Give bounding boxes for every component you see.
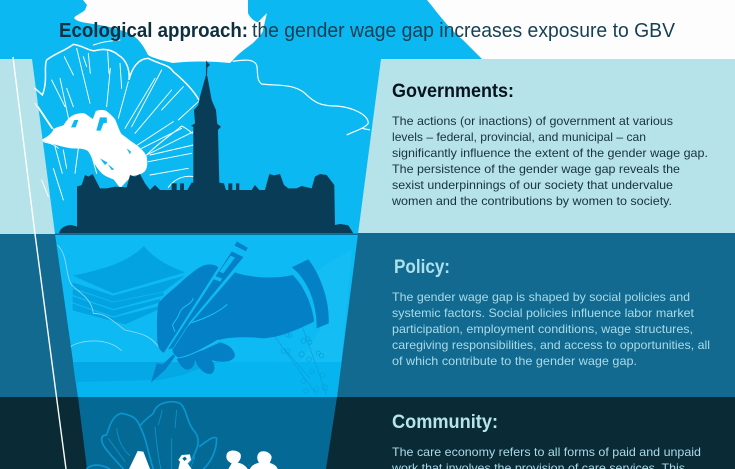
white wave <box>233 60 370 135</box>
community body <box>391 445 701 469</box>
community figures <box>129 451 278 469</box>
pen <box>167 241 248 350</box>
text: policy <box>392 256 710 368</box>
governments body <box>391 114 708 208</box>
governments body: levels – federal, provincial, and municipal – can <box>392 130 646 144</box>
hand: fingers <box>177 342 235 374</box>
community body: The care economy refers to all forms of paid and unpaid <box>392 445 701 459</box>
text: governments <box>391 80 708 208</box>
title <box>59 19 675 42</box>
policy body: The gender wage gap is shaped by social policies and <box>392 290 690 304</box>
title: Ecological approach: <box>59 20 248 42</box>
policy body: participation, employment conditions, wage structures, <box>392 322 693 336</box>
panel: community band <box>0 397 735 469</box>
illustration: flag on tower <box>206 61 210 76</box>
panel: policy band <box>0 233 735 397</box>
illustration: paper stack <box>73 246 185 324</box>
river line <box>13 57 66 469</box>
panel: governments band <box>0 59 735 234</box>
heading: governments: Governments: <box>392 80 514 102</box>
title: the gender wage gap increases exposure to GBV <box>252 19 675 42</box>
heading: community: Community: <box>392 411 498 433</box>
governments body: The persistence of the gender wage gap reveals the <box>392 162 680 176</box>
pen nib <box>151 354 175 383</box>
illustration: community shell <box>87 402 217 469</box>
governments body: sexist underpinnings of our society that undervalue <box>392 178 673 192</box>
illustration: flower core <box>43 111 146 187</box>
governments body: significantly influence the extent of the gender wage gap. <box>392 146 708 160</box>
governments body: women and the contributions by women to society. <box>391 194 672 208</box>
illustration: hand with pen <box>151 241 329 383</box>
illustration: parliament silhouette <box>59 76 353 233</box>
hand: back and fingers behind the pen <box>157 265 218 353</box>
illustration: sprig <box>275 317 328 395</box>
text: community <box>391 411 701 469</box>
policy body: systemic factors. Social policies influence labor market <box>392 306 695 320</box>
hand: cuff <box>292 259 329 328</box>
heading: policy: Policy: <box>394 256 450 278</box>
illustration: flower <box>35 40 199 200</box>
faint water lines <box>57 245 158 351</box>
policy body <box>392 290 710 368</box>
hand: palm and thumb <box>172 272 314 358</box>
policy body: of which contribute to the gender wage gap. <box>392 354 637 368</box>
policy body: caregiving responsibilities, and access to opportunities, all <box>392 338 710 352</box>
governments body: The actions (or inactions) of government at various <box>392 114 673 128</box>
